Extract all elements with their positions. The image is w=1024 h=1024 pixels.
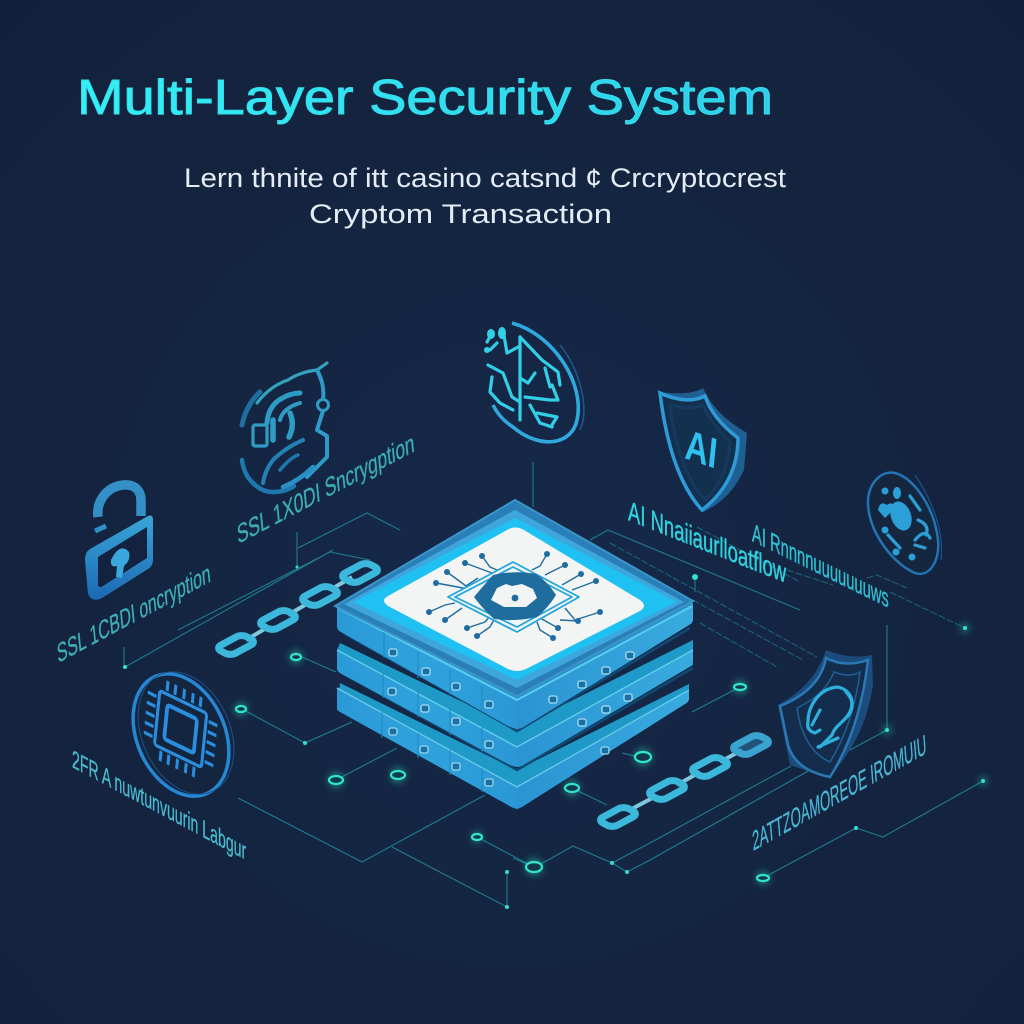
label: AI monitoring: AI Nnaiiaurlloatflow <box>628 495 787 589</box>
left chain <box>216 562 380 656</box>
label: AI analysis: AI Rnnnnuuuuuuuws <box>752 517 889 614</box>
icon: headset head <box>242 363 328 492</box>
top face <box>335 500 693 696</box>
label: SSL encryption left: SSL 1CBDI oncryption <box>56 557 212 669</box>
icon: chip disc <box>115 657 252 811</box>
layer 2 <box>337 628 693 767</box>
subtitle: Lern thnite of itt casino catsnd ¢ Crcryptocrest <box>184 163 787 193</box>
server stack <box>335 500 693 809</box>
chip traces <box>429 554 600 638</box>
glowing circuit nodes <box>123 566 987 909</box>
title: Multi-Layer Security System <box>77 71 773 125</box>
chip core <box>474 572 556 620</box>
layer 1 <box>335 500 693 729</box>
chip outline <box>448 562 579 632</box>
subtitle <box>184 163 787 229</box>
icon: brain disc <box>484 323 584 442</box>
subtitle: Cryptom Transaction <box>309 199 612 229</box>
icon: padlock <box>85 485 153 600</box>
layer 3 <box>337 668 693 809</box>
icon: support shield <box>778 650 873 778</box>
icon: AI shield: AI <box>683 420 720 478</box>
white face <box>384 528 644 671</box>
circuit lines <box>124 462 983 907</box>
right chain <box>598 734 771 828</box>
label: 2FA layer: 2FR A nuwtunvuurin Labgur <box>72 745 246 866</box>
icon: neural disc <box>868 473 941 574</box>
chip keyhole <box>491 584 537 607</box>
icon: AI shield <box>660 388 747 512</box>
label: SSL encryption top: SSL 1X0DI Sncrygption <box>236 427 416 550</box>
